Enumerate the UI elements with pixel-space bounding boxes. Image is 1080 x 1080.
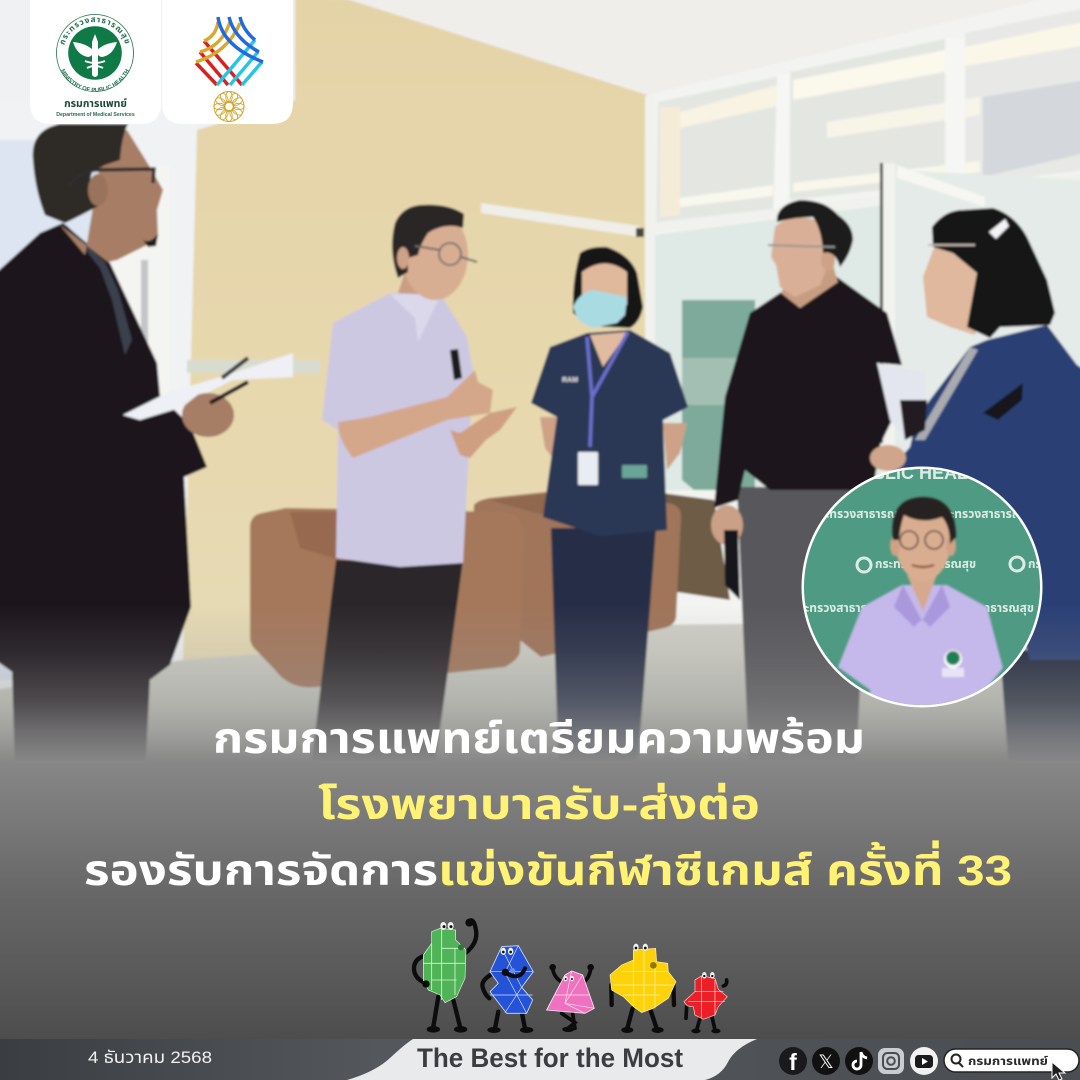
slogan ribbon: The Best for the Most <box>417 1043 683 1073</box>
person: man in lilac shirt <box>308 205 517 790</box>
backdrop text <box>805 463 1042 615</box>
logo caption: กรมการแพทย์ <box>64 98 127 110</box>
footer date: 4 ธันวาคม 2568 <box>88 1049 212 1067</box>
headline <box>84 715 1012 895</box>
person: nurse with mask and lanyard <box>531 247 688 790</box>
mascot: blue <box>482 946 533 1033</box>
icon: Ministry of Public Health seal <box>56 14 134 92</box>
search pill: กรมการแพทย์ <box>944 1049 1079 1072</box>
footer bar <box>0 1039 1080 1080</box>
backdrop text: ะทรวงสาธารณสุข <box>950 507 1037 521</box>
icon: Ministry of Public Health seal: กระทรวงสาธารณสุข <box>60 17 130 45</box>
mascot: red <box>684 972 727 1033</box>
icon: Ministry of Public Health seal: MINISTRY OF PUBLIC HEALTH <box>61 68 129 92</box>
floor <box>0 623 744 744</box>
inset portrait: circular photo <box>800 463 1045 710</box>
mascot: yellow <box>610 944 676 1033</box>
social icon: Instagram <box>878 1048 904 1074</box>
social icon: TikTok <box>845 1047 873 1075</box>
social icon: X <box>812 1047 840 1075</box>
headline line 3: รองรับการจัดการ แข่งขันกีฬาซีเกมส์ ครั้งที่ 33 <box>84 840 1012 895</box>
mascot: green <box>414 919 476 1033</box>
window wall <box>647 0 1080 640</box>
clipboard and papers <box>123 353 293 420</box>
social icon: Facebook: f <box>789 1049 797 1075</box>
mascots: five SEA Games characters <box>414 919 727 1033</box>
mascot: pink <box>547 964 594 1032</box>
bottom grey gradient overlay <box>0 605 1080 1080</box>
backdrop text: BLIC HEALTH <box>872 463 991 483</box>
backdrop text: ะทรวงสาธารณสุข <box>825 507 912 521</box>
social icon: YouTube <box>910 1047 938 1075</box>
backdrop text: กระทรวงสาธารณสุข <box>875 557 976 571</box>
social icon: X: 𝕏 <box>818 1052 834 1073</box>
person: nurse with mask and lanyard: RAM <box>562 377 578 384</box>
sofas <box>250 492 681 687</box>
logo card: SEA Games ribbon emblem <box>162 0 293 124</box>
logo card: Department of Medical Services <box>30 0 161 124</box>
person: man in dark suit with clipboard <box>0 124 293 790</box>
person: woman in navy blazer <box>870 208 1080 790</box>
person: man in black shirt <box>711 200 902 790</box>
slogan ribbon <box>347 1039 757 1080</box>
search pill: กรมการแพทย์: กรมการแพทย์ <box>968 1054 1048 1068</box>
headline line 2: โรงพยาบาลรับ-ส่งต่อ <box>318 781 760 829</box>
icon: gold flower <box>214 92 244 122</box>
backdrop text: าธารณสุข <box>985 601 1034 615</box>
logo caption <box>56 98 135 118</box>
room background <box>0 0 1080 754</box>
icon: ribbon stripes <box>196 17 263 85</box>
portrait man <box>838 497 1003 710</box>
backdrop text: ะทรวงสาธารณ <box>805 601 878 615</box>
backdrop text: กร <box>1028 557 1042 571</box>
icon: mouse cursor <box>1052 1062 1065 1080</box>
photo: hospital visit scene <box>0 0 1080 754</box>
logo caption: Department of Medical Services <box>56 112 135 118</box>
social icon: Facebook <box>779 1047 807 1075</box>
headline line 1: กรมการแพทย์เตรียมความพร้อม <box>213 715 865 763</box>
